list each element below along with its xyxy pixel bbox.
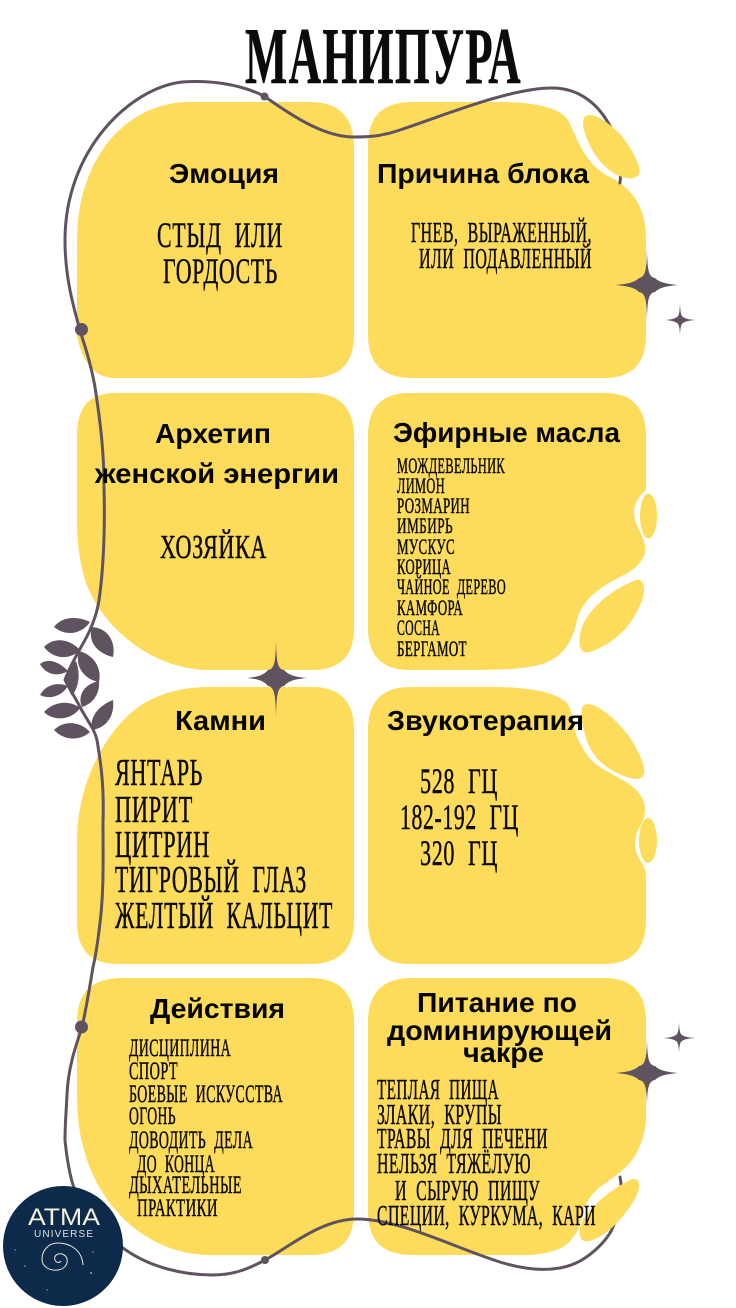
- list: essential oils: ЧАЙНОЕ ДЕРЕВО: [397, 574, 506, 599]
- list: actions: ДО КОНЦА: [137, 1151, 215, 1178]
- icon: small sparkle upper right: [666, 303, 695, 335]
- text: sound frequencies: [400, 761, 519, 873]
- panel: nutrition: [368, 978, 646, 1255]
- panel: archetype: [77, 393, 354, 670]
- decorative curved line: [65, 82, 621, 1275]
- list: nutrition: НЕЛЬЗЯ ТЯЖЁЛУЮ: [377, 1149, 531, 1180]
- logo: Atma Universe: UNIVERSE: [34, 1229, 93, 1240]
- panel: emotion: [77, 102, 354, 378]
- list: essential oils: КАМФОРА: [397, 595, 463, 620]
- icon: leaf branch: [40, 618, 114, 739]
- panel: block cause: [368, 102, 646, 378]
- heading: nutrition: чакре: [463, 1037, 544, 1068]
- list: actions: ОГОНЬ: [129, 1103, 176, 1130]
- list: essential oils: КОРИЦА: [397, 554, 451, 579]
- heading: nutrition: [387, 987, 612, 1068]
- heading: emotion: Эмоция: [169, 158, 279, 189]
- icon: sparkle upper right: [615, 250, 678, 320]
- heading: block cause: Причина блока: [377, 158, 589, 189]
- text: emotion: ГОРДОСТЬ: [163, 251, 278, 291]
- text: sound frequencies: 528 ГЦ: [420, 761, 498, 801]
- text: emotion: [157, 215, 283, 291]
- heading: archetype: [94, 418, 339, 489]
- text: emotion: СТЫД ИЛИ: [157, 215, 283, 255]
- panel: sound therapy: [368, 687, 646, 964]
- list: actions: [129, 1035, 283, 1222]
- heading: sound therapy: Звукотерапия: [387, 705, 584, 736]
- list: actions: ПРАКТИКИ: [137, 1195, 218, 1222]
- list: essential oils: [397, 453, 506, 661]
- list: essential oils: ЛИМОН: [397, 473, 445, 498]
- icon: small sparkle lower right: [664, 1022, 695, 1053]
- heading: nutrition: Питание по: [417, 987, 577, 1018]
- list: essential oils: МОЖДЕВЕЛЬНИК: [397, 453, 505, 478]
- heading: essential oils: Эфирные масла: [393, 417, 620, 448]
- list: stones: ЦИТРИН: [115, 824, 210, 866]
- list: essential oils: СОСНА: [397, 615, 440, 640]
- text: block cause: [411, 218, 592, 275]
- line dots: [75, 92, 269, 1264]
- text: sound frequencies: 320 ГЦ: [420, 833, 498, 873]
- text: block cause: ГНЕВ, ВЫРАЖЕННЫЙ,: [411, 218, 592, 249]
- list: essential oils: ИМБИРЬ: [397, 513, 453, 538]
- list: actions: БОЕВЫЕ ИСКУССТВА: [129, 1081, 283, 1108]
- panel: stones: [77, 687, 354, 964]
- list: essential oils: БЕРГАМОТ: [397, 636, 467, 661]
- panel: essential oils: [368, 393, 646, 670]
- list: nutrition: ТРАВЫ ДЛЯ ПЕЧЕНИ: [377, 1124, 548, 1155]
- list: stones: ПИРИТ: [115, 789, 193, 831]
- text: sound frequencies: 182-192 ГЦ: [400, 797, 519, 837]
- list: nutrition: И СЫРУЮ ПИЩУ: [395, 1176, 540, 1207]
- heading: stones: Камни: [175, 705, 266, 736]
- logo: Atma Universe: ATMA: [28, 1204, 100, 1231]
- list: actions: ДЫХАТЕЛЬНЫЕ: [129, 1172, 242, 1199]
- heading: nutrition: доминирующей: [387, 1015, 612, 1046]
- list: actions: СПОРТ: [129, 1058, 178, 1085]
- list: stones: ЖЕЛТЫЙ КАЛЬЦИТ: [115, 895, 333, 937]
- list: essential oils: РОЗМАРИН: [397, 493, 470, 518]
- icon: sparkle lower right: [615, 1040, 678, 1104]
- detached yellow shapes: [579, 115, 657, 1241]
- heading: actions: Действия: [150, 993, 285, 1024]
- text: archetype: ХОЗЯЙКА: [160, 529, 267, 566]
- panel: actions: [77, 978, 354, 1255]
- list: nutrition: [377, 1075, 596, 1232]
- list: nutrition: ЗЛАКИ, КРУПЫ: [377, 1100, 502, 1131]
- list: essential oils: МУСКУС: [397, 534, 455, 559]
- list: stones: [115, 752, 333, 937]
- text: block cause: ИЛИ ПОДАВЛЕННЫЙ: [419, 244, 592, 275]
- list: actions: ДИСЦИПЛИНА: [129, 1035, 231, 1062]
- list: stones: ЯНТАРЬ: [115, 752, 203, 794]
- heading: archetype: Архетип: [155, 418, 271, 449]
- icon: sparkle centre: [247, 640, 307, 718]
- list: stones: ТИГРОВЫЙ ГЛАЗ: [115, 859, 307, 901]
- logo: Atma Universe: [3, 1186, 123, 1306]
- title: МАНИПУРА: [245, 13, 522, 101]
- heading: archetype: женской энергии: [94, 458, 339, 489]
- list: actions: ДОВОДИТЬ ДЕЛА: [129, 1127, 253, 1154]
- list: nutrition: ТЕПЛАЯ ПИЩА: [377, 1075, 499, 1106]
